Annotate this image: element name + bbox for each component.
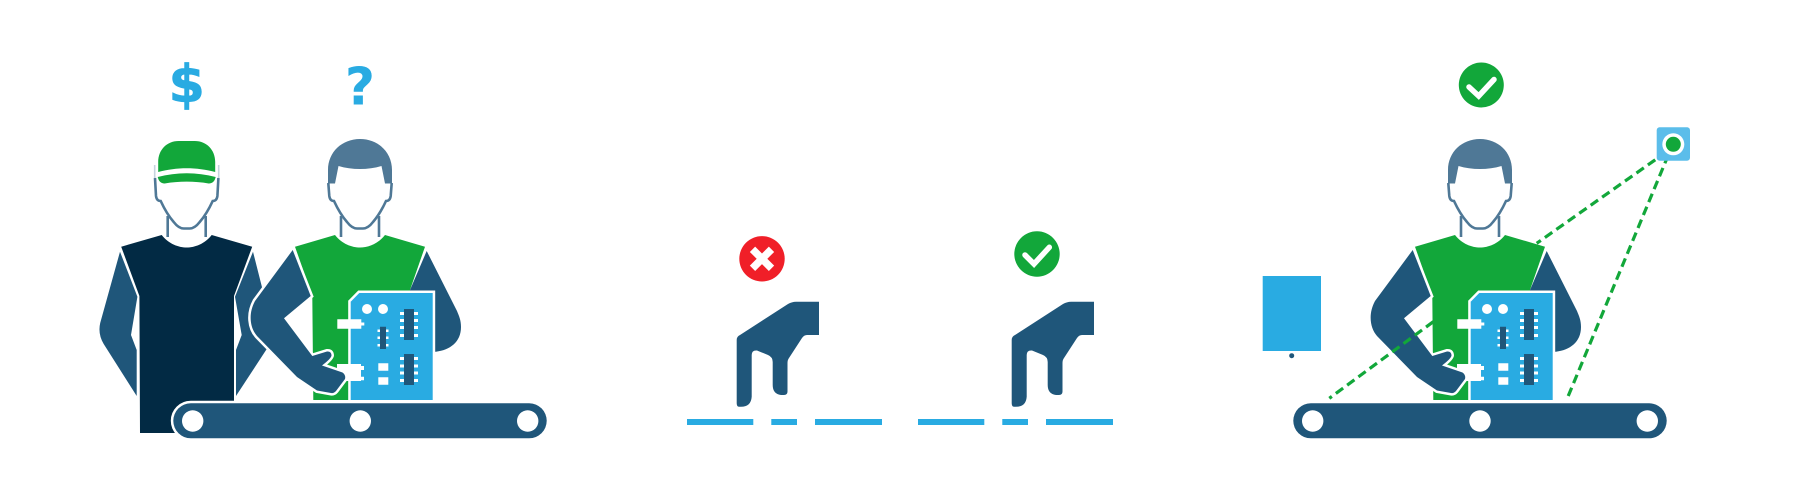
icon: pointing hand [737, 302, 819, 407]
shirt: green [1415, 235, 1545, 400]
left sleeve [99, 252, 137, 396]
circuit board [1457, 293, 1553, 400]
shirt: green [295, 235, 425, 400]
worker with circuit board [251, 139, 461, 400]
cap strap [155, 165, 219, 178]
panel: manual inspection workers [99, 55, 547, 438]
icon: green check [1014, 231, 1060, 277]
right sleeve [1530, 251, 1581, 352]
panel: accept example [918, 231, 1113, 425]
icon: red cross [739, 236, 785, 282]
icon: dollar sign: $ [169, 55, 205, 115]
hair [1448, 139, 1512, 184]
dashed baseline [918, 419, 1113, 425]
cap crown [158, 141, 215, 172]
icon: question mark: ? [345, 58, 375, 118]
arm and hand [1371, 250, 1465, 393]
worker with circuit board [1371, 139, 1581, 400]
dashed baseline [687, 419, 882, 425]
icon: pointing hand [1012, 302, 1094, 407]
neck [341, 216, 379, 237]
sensor [1657, 127, 1690, 161]
panel: assisted worker [1263, 62, 1690, 438]
face outline [155, 178, 218, 228]
circuit board [337, 293, 433, 400]
sensor dashed beams [1537, 152, 1668, 397]
neck [168, 216, 206, 237]
worker with green cap [99, 141, 269, 433]
face outline [328, 183, 392, 228]
dashed beam across arm [1329, 322, 1433, 398]
conveyor belt [173, 403, 547, 438]
right sleeve [235, 252, 269, 396]
conveyor belt [1293, 403, 1667, 438]
shirt: navy [121, 235, 252, 433]
face outline [1448, 183, 1512, 228]
panel: reject example [687, 236, 882, 425]
icon: green check [1459, 62, 1504, 108]
neck [1461, 216, 1499, 237]
cap bill [158, 173, 216, 184]
hair [328, 139, 392, 184]
tablet display [1263, 276, 1321, 358]
right sleeve [410, 251, 461, 352]
arm and hand [251, 250, 345, 393]
